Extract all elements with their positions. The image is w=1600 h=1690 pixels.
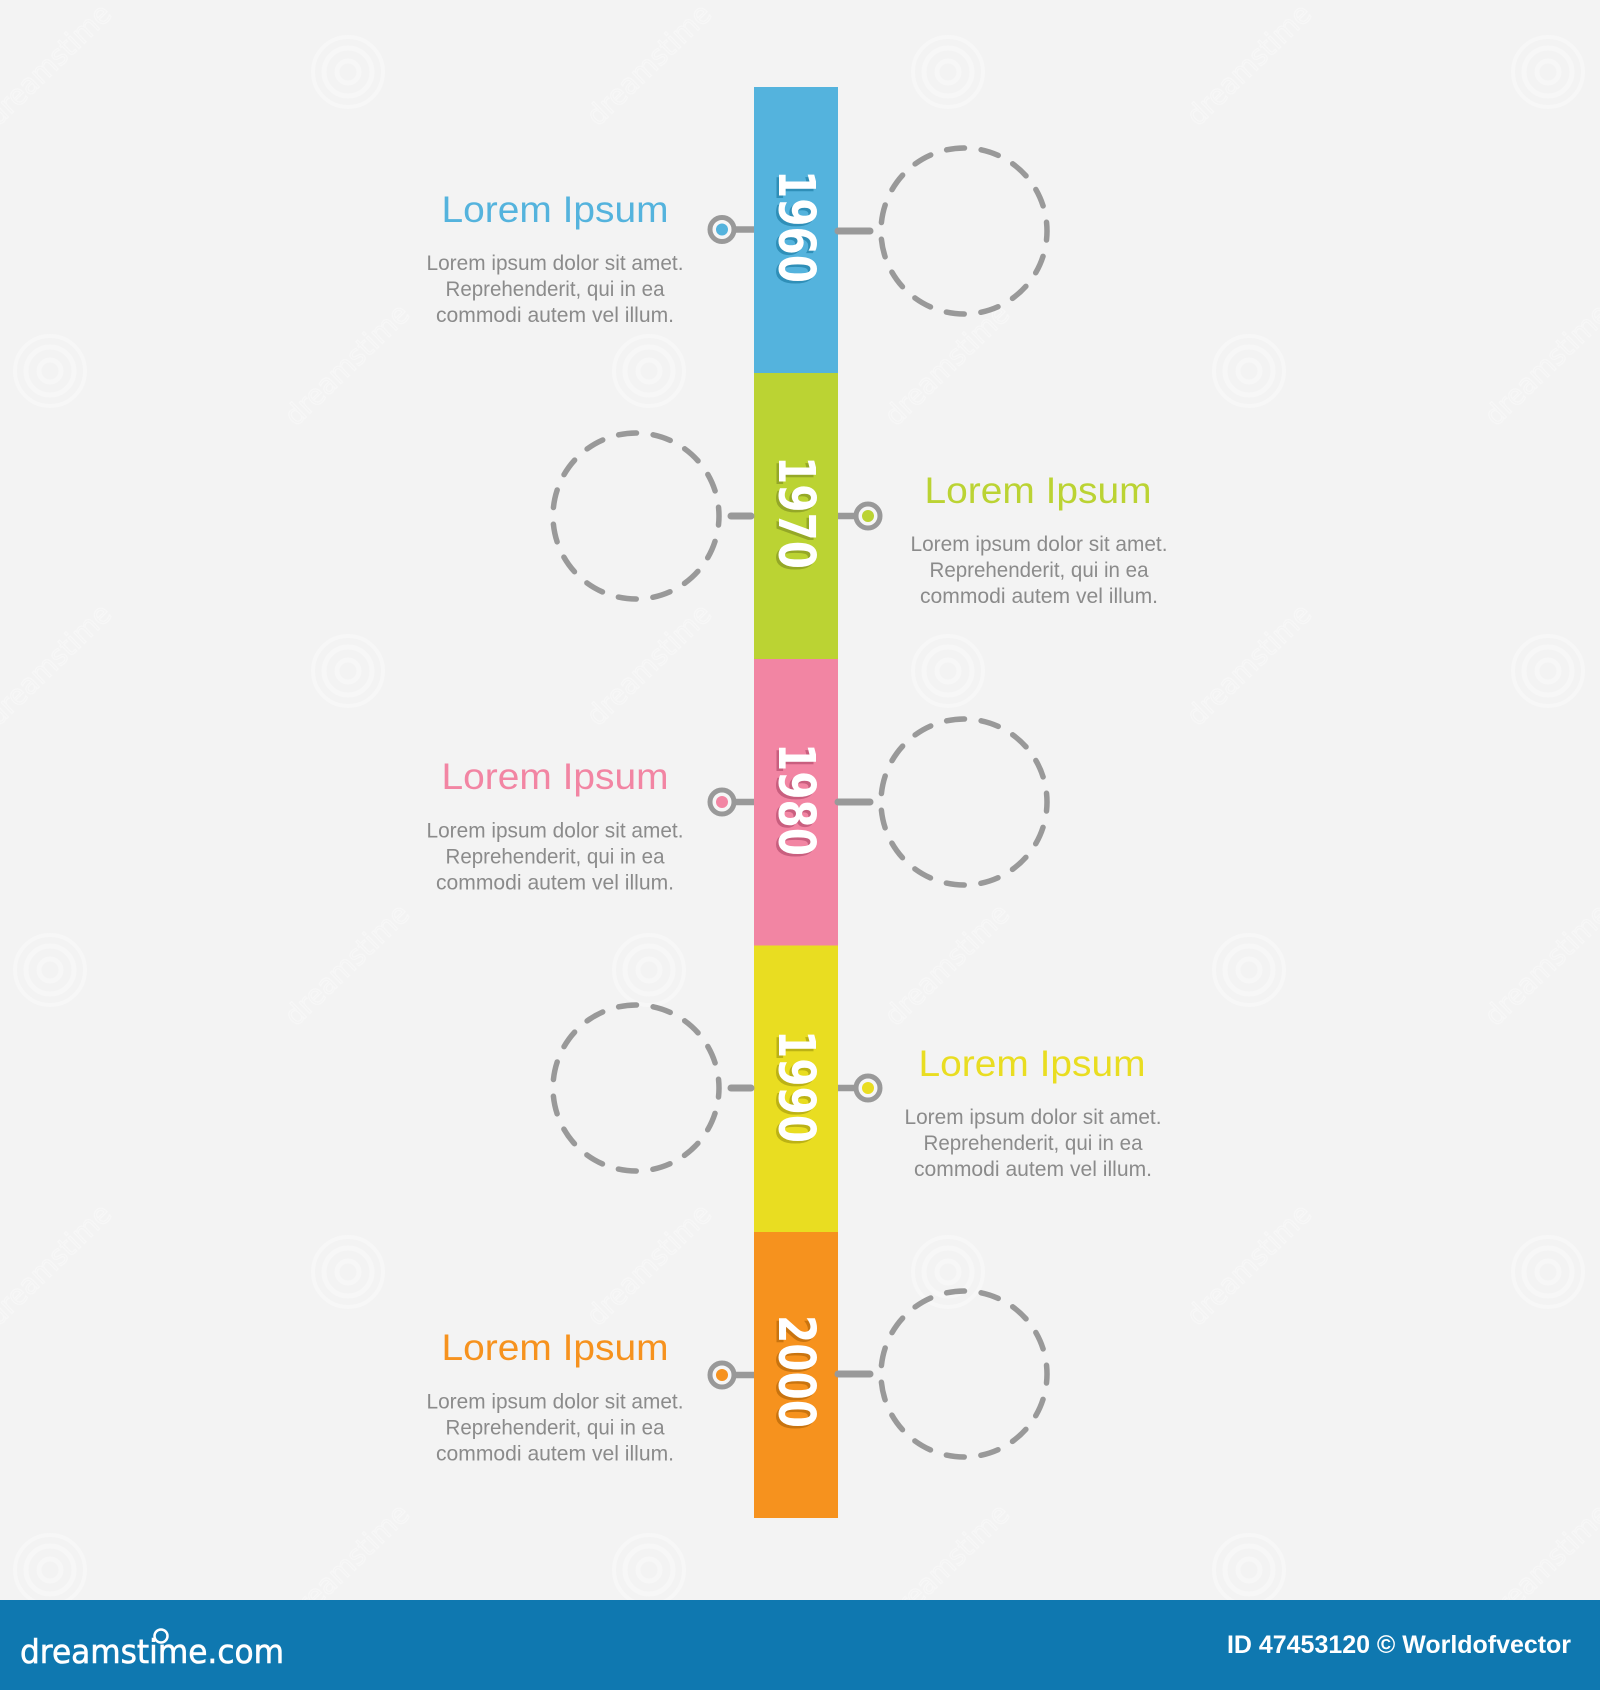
year 1990: 1990 (764, 1032, 822, 1146)
heading 1970: Lorem Ipsum (924, 470, 1152, 511)
description 2000: Lorem ipsum dolor sit amet. (426, 1390, 684, 1414)
description 1990: Reprehenderit, qui in ea (924, 1132, 1143, 1155)
description 2000: Reprehenderit, qui in ea (446, 1416, 665, 1440)
dashed circle 2000 (881, 1291, 1047, 1457)
watermark pattern: dreamstime (878, 297, 1016, 432)
heading 1960: Lorem Ipsum (442, 189, 668, 230)
year 1990: 1990 (766, 1030, 825, 1143)
dashed circle 1980 (881, 719, 1047, 885)
connector 1980 (838, 798, 870, 806)
pin 2000 (710, 1363, 754, 1387)
connector 2000 (838, 1370, 870, 1378)
segment: 1980 (754, 659, 838, 946)
description 2000 (426, 1390, 684, 1466)
description 1960: Reprehenderit, qui in ea (446, 278, 665, 301)
entry: 1960 (426, 148, 1047, 327)
watermark pattern: dreamstime (580, 597, 718, 732)
heading 2000: Lorem Ipsum (442, 1327, 668, 1368)
description 1960: Lorem ipsum dolor sit amet. (426, 252, 684, 275)
year 1980: 1980 (766, 743, 825, 856)
year 1970: 1970 (766, 456, 825, 569)
description 1970: Lorem ipsum dolor sit amet. (910, 533, 1168, 556)
pin 1960 (710, 218, 754, 242)
connector 1970 (731, 512, 751, 520)
watermark pattern: dreamstime (580, 1197, 718, 1332)
year 1980: 1980 (764, 746, 822, 858)
segment: 1970 (754, 373, 838, 659)
footer logo: dreamstime.com (20, 1632, 284, 1671)
entry: 1970 (553, 433, 1168, 608)
description 1960: commodi autem vel illum. (436, 304, 674, 327)
description 1970 (910, 533, 1168, 608)
description 1970: commodi autem vel illum. (920, 585, 1158, 608)
description 1980 (426, 820, 684, 894)
dashed circle 1970 (553, 433, 719, 599)
year 1960: 1960 (764, 172, 822, 286)
watermark pattern: dreamstime (878, 897, 1016, 1032)
segment: 1990 (754, 946, 838, 1232)
year 1960: 1960 (766, 170, 825, 283)
description 1980: commodi autem vel illum. (436, 872, 674, 894)
year 2000: 2000 (764, 1318, 822, 1430)
entry: 1990 (553, 1005, 1162, 1181)
connector 1960 (838, 228, 870, 234)
heading 1990: Lorem Ipsum (918, 1043, 1146, 1084)
description 2000: commodi autem vel illum. (436, 1442, 674, 1466)
year 2000: 2000 (766, 1315, 825, 1428)
dashed circle 1960 (881, 148, 1047, 314)
watermark pattern: dreamstime (1180, 597, 1318, 732)
connector 1990 (731, 1084, 751, 1092)
heading 1980: Lorem Ipsum (442, 756, 668, 797)
description 1990 (904, 1106, 1162, 1181)
segment: 2000 (754, 1232, 838, 1518)
watermark pattern: dreamstime (1180, 1197, 1318, 1332)
description 1990: Lorem ipsum dolor sit amet. (904, 1106, 1162, 1129)
description 1980: Reprehenderit, qui in ea (446, 846, 665, 868)
pin 1980 (710, 790, 754, 814)
footer credit: ID 47453120 © Worldofvector (1227, 1631, 1571, 1659)
segment: 1960 (754, 87, 838, 373)
pin 1990 (838, 1076, 880, 1100)
year 1970: 1970 (764, 458, 822, 572)
dashed circle 1990 (553, 1005, 719, 1171)
description 1970: Reprehenderit, qui in ea (930, 559, 1149, 582)
description 1960 (426, 252, 684, 327)
watermark pattern: dreamstime (278, 897, 416, 1032)
watermark pattern: dreamstime (278, 1497, 416, 1632)
watermark pattern: dreamstime (878, 1497, 1016, 1632)
description 1990: commodi autem vel illum. (914, 1158, 1152, 1181)
footer banner (0, 1600, 1600, 1690)
description 1980: Lorem ipsum dolor sit amet. (426, 820, 684, 842)
entry: 2000 (426, 1291, 1047, 1466)
entry: 1980 (426, 719, 1047, 894)
watermark pattern: dreamstime (278, 297, 416, 432)
timeline bar (754, 87, 838, 1518)
pin 1970 (838, 504, 880, 528)
